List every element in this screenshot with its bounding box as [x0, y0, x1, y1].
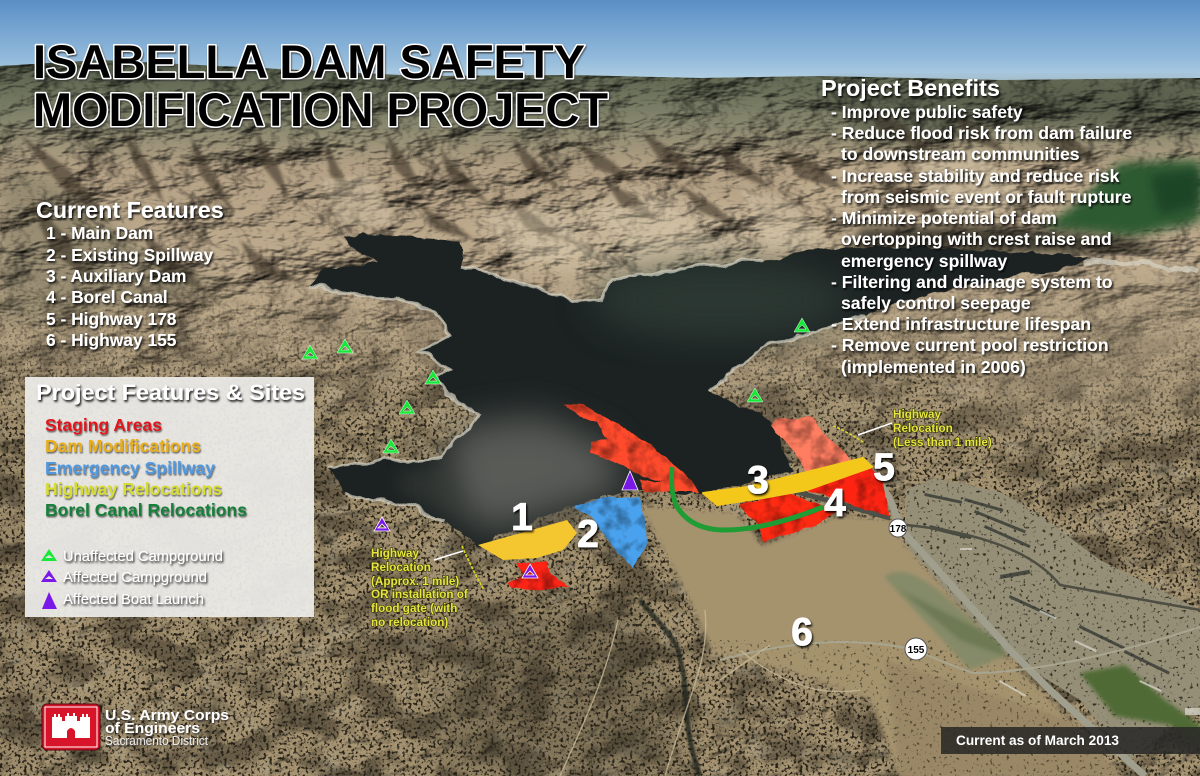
project benefits: from seismic event or fault rupture — [841, 187, 1132, 207]
affected campground and boat launch markers — [374, 471, 638, 578]
project benefits: (implemented in 2006) — [841, 357, 1026, 377]
project benefits: - Increase stability and reduce risk — [831, 166, 1120, 186]
highway shields — [889, 519, 927, 660]
project benefits: overtopping with crest raise and — [841, 229, 1112, 249]
dam feature numbers: 3 — [747, 459, 769, 502]
date tag: Current as of March 2013 — [956, 733, 1119, 748]
label: unaffected campground: Unaffected Campground — [63, 548, 223, 565]
highway relocations — [462, 426, 863, 590]
green valley — [1040, 160, 1200, 236]
mountain ridge shadows — [20, 105, 1100, 295]
label: affected campground: Affected Campground — [63, 569, 207, 586]
legend categories: Dam Modifications — [45, 436, 201, 456]
roads — [868, 470, 1145, 776]
project benefits: - Extend infrastructure lifespan — [831, 314, 1091, 334]
callout: east highway relocation: Highway — [893, 408, 942, 421]
logo: US Army Corps of Engineers — [42, 704, 229, 750]
current features: 6 - Highway 155 — [46, 330, 177, 350]
callout: west highway relocation: Relocation — [371, 561, 431, 574]
speckled land — [0, 230, 1200, 776]
callout: east highway relocation: (Less than 1 mile) — [893, 436, 992, 449]
unaffected campground markers — [302, 318, 810, 453]
legend categories: Borel Canal Relocations — [45, 500, 247, 520]
emergency spillway — [573, 497, 648, 567]
dam feature numbers — [511, 446, 895, 654]
borel canal relocation — [672, 467, 823, 530]
mountain lit faces — [320, 150, 1030, 262]
sky — [0, 0, 1200, 100]
project benefits: - Minimize potential of dam — [831, 208, 1057, 228]
dam feature numbers: 2 — [577, 513, 599, 556]
shoreline — [309, 260, 1200, 520]
label: affected boat launch: Affected Boat Launch — [63, 591, 204, 608]
title: MODIFICATION PROJECT — [33, 83, 608, 136]
dam modifications — [478, 458, 872, 560]
current features: 2 - Existing Spillway — [46, 245, 214, 265]
panel: project features and sites legend — [25, 377, 314, 617]
callout: west highway relocation: no relocation) — [371, 616, 448, 629]
callout: west highway relocation: flood gate (with — [371, 602, 457, 615]
project benefits: - Remove current pool restriction — [831, 335, 1109, 355]
legend heading: Project Features & Sites — [36, 380, 305, 405]
callout: east highway relocation: Relocation — [893, 422, 953, 435]
lake — [309, 236, 1200, 545]
town buildings — [924, 493, 1170, 675]
current features — [36, 197, 224, 350]
town area — [905, 478, 1200, 760]
dam feature numbers: 1 — [511, 496, 533, 539]
project benefits: Project Benefits — [821, 75, 1000, 101]
current features: 3 - Auxiliary Dam — [46, 266, 186, 286]
highway shields: 155 — [908, 645, 925, 656]
icon: affected campground — [41, 570, 57, 582]
legend categories: Staging Areas — [45, 415, 162, 435]
current features: 1 - Main Dam — [46, 223, 153, 243]
logo: US Army Corps of Engineers: of Engineers — [105, 720, 200, 737]
logo: US Army Corps of Engineers: Sacramento District — [105, 734, 208, 748]
project benefits: to downstream communities — [841, 144, 1080, 164]
title: ISABELLA DAM SAFETY — [33, 35, 585, 88]
valley floor — [640, 506, 1120, 776]
project benefits: - Reduce flood risk from dam failure — [831, 123, 1132, 143]
project benefits: safely control seepage — [841, 293, 1031, 313]
highway shields: 178 — [890, 524, 907, 535]
staging areas — [507, 403, 890, 590]
current features: Current Features — [36, 197, 224, 223]
icon: unaffected campground — [41, 549, 57, 561]
project benefits: - Improve public safety — [831, 102, 1023, 122]
legend categories: Emergency Spillway — [45, 458, 215, 478]
legend categories: Highway Relocations — [45, 479, 222, 499]
legend categories — [45, 415, 247, 520]
current features: 5 - Highway 178 — [46, 309, 177, 329]
project benefits — [821, 75, 1132, 377]
callout: west highway relocation: (Approx. 1 mile) — [371, 575, 459, 588]
dam feature numbers: 5 — [873, 446, 895, 489]
dam feature numbers: 6 — [791, 611, 813, 654]
logo: US Army Corps of Engineers: U.S. Army Corps — [105, 707, 229, 724]
dam feature numbers: 4 — [824, 482, 846, 525]
current features: 4 - Borel Canal — [46, 287, 168, 307]
icon: affected boat launch — [42, 592, 57, 609]
project benefits: - Filtering and drainage system to — [831, 272, 1113, 292]
callout: west highway relocation — [371, 547, 468, 629]
callout: west highway relocation: Highway — [371, 547, 420, 560]
callout: west highway relocation: OR installation of — [371, 588, 468, 601]
callout: east highway relocation — [858, 408, 992, 449]
project benefits: emergency spillway — [841, 251, 1007, 271]
date tag — [941, 727, 1200, 754]
title — [33, 35, 608, 136]
